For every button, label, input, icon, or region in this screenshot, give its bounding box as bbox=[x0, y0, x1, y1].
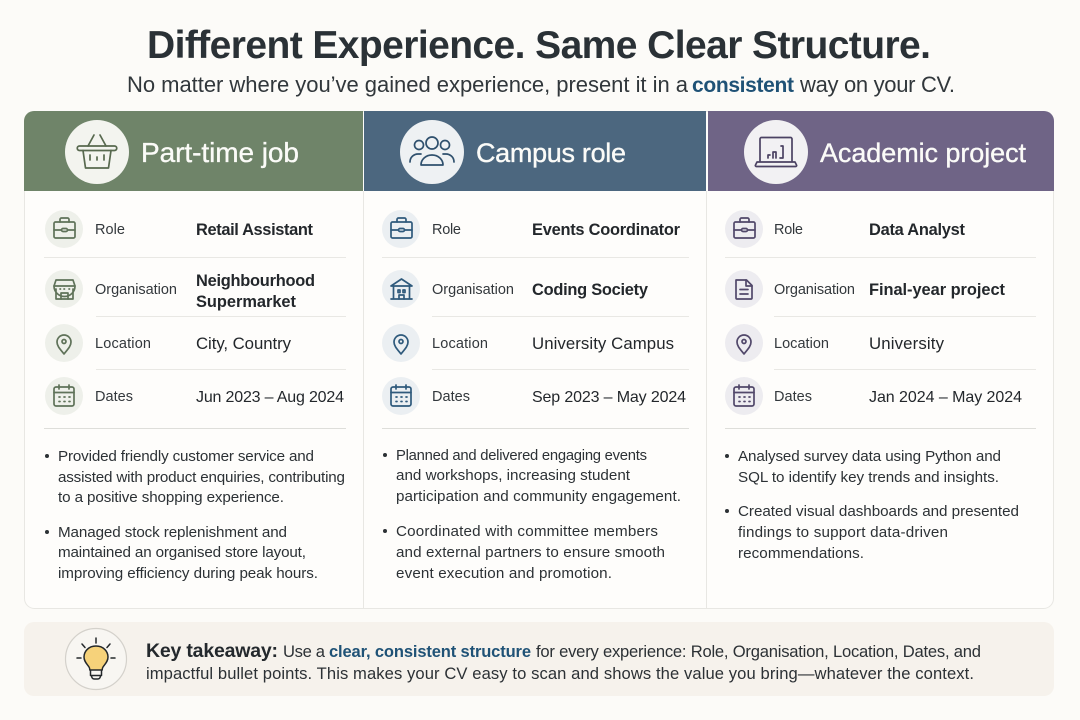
bullet list: part-time job bbox=[45, 448, 345, 582]
callout: key takeaway: impactful bullet points. This makes your CV easy to scan and shows the value you bring—whatever the context. bbox=[146, 664, 974, 683]
row: dates: Jan 2024 – May 2024 bbox=[869, 389, 1022, 406]
header: campus role bbox=[364, 111, 706, 191]
callout: key takeaway: Key takeaway: bbox=[146, 640, 278, 662]
bullet list: campus role: event execution and promotion. bbox=[396, 565, 612, 582]
header: campus role: Campus role bbox=[476, 138, 626, 168]
bullet list: academic project bbox=[725, 448, 1019, 562]
icon: map pin bbox=[394, 335, 408, 354]
row: dates: Sep 2023 – May 2024 bbox=[532, 389, 686, 406]
row: role bbox=[382, 210, 681, 248]
row: organisation: Final-year project bbox=[869, 281, 1006, 299]
bullet list: campus role bbox=[383, 448, 681, 582]
panel: part-time job bbox=[24, 111, 363, 582]
icon: briefcase bbox=[54, 218, 75, 238]
row: organisation bbox=[45, 270, 315, 311]
icon: storefront bbox=[54, 280, 75, 299]
bullet list: part-time job: to a positive shopping experience. bbox=[58, 489, 284, 506]
icon: light bulb bbox=[77, 638, 115, 679]
subtitle bbox=[127, 72, 955, 97]
row: dates bbox=[45, 377, 344, 415]
row: organisation bbox=[382, 270, 649, 308]
title: Different Experience. Same Clear Structure. bbox=[147, 24, 931, 67]
icon: people group bbox=[410, 137, 454, 165]
callout: key takeaway: for every experience: Role, Organisation, Location, Dates, and bbox=[536, 642, 981, 661]
bullet list: part-time job: maintained an organised store layout, bbox=[58, 544, 306, 561]
icon: calendar bbox=[391, 385, 411, 406]
bullet list: academic project: findings to support data-driven bbox=[738, 524, 948, 541]
bullet list: part-time job: Managed stock replenishment and bbox=[58, 524, 287, 541]
row: role: Retail Assistant bbox=[196, 221, 314, 239]
header: part-time job: Part-time job bbox=[141, 137, 299, 168]
subtitle: No matter where you’ve gained experience, present it in a bbox=[127, 72, 689, 97]
icon: laptop with chart bbox=[755, 138, 797, 167]
bullet list: academic project: SQL to identify key trends and insights. bbox=[738, 469, 999, 486]
row: location: Location bbox=[774, 336, 829, 352]
callout: key takeaway: Use a bbox=[283, 642, 326, 661]
bullet list: academic project: Created visual dashboards and presented bbox=[738, 503, 1019, 520]
icon: calendar bbox=[54, 385, 74, 406]
row: role bbox=[45, 210, 314, 248]
subtitle: way on your CV. bbox=[799, 72, 955, 97]
icon: document bbox=[736, 280, 752, 299]
bullet list: part-time job: Provided friendly customer service and bbox=[58, 448, 314, 465]
row: organisation: Organisation bbox=[95, 282, 177, 298]
header: part-time job bbox=[24, 111, 363, 191]
row: organisation: Coding Society bbox=[532, 281, 649, 299]
row: location: City, Country bbox=[196, 334, 292, 353]
row: location: University bbox=[869, 334, 945, 353]
row: location bbox=[725, 324, 945, 362]
panel: academic project bbox=[708, 111, 1054, 562]
row: dates bbox=[382, 377, 686, 415]
callout: key takeaway: clear, consistent structure bbox=[329, 643, 531, 661]
bullet list: part-time job: assisted with product enquiries, contributing bbox=[58, 469, 345, 486]
row: organisation bbox=[725, 270, 1006, 308]
bullet list: campus role: Planned and delivered engaging events bbox=[396, 448, 647, 464]
row: role: Role bbox=[774, 222, 803, 238]
row: dates bbox=[725, 377, 1022, 415]
row: role: Events Coordinator bbox=[532, 221, 681, 239]
row: dates: Dates bbox=[432, 389, 470, 405]
row: dates: Dates bbox=[774, 389, 812, 405]
row: location: Location bbox=[432, 336, 488, 352]
bullet list: campus role: and workshops, increasing student bbox=[396, 467, 631, 484]
icon: briefcase bbox=[391, 218, 412, 238]
callout: key takeaway bbox=[24, 622, 1054, 696]
bullet list: campus role: participation and community engagement. bbox=[396, 488, 681, 505]
row: dates: Jun 2023 – Aug 2024 bbox=[196, 389, 344, 406]
bullet list: campus role: Coordinated with committee members bbox=[396, 523, 658, 540]
bullet list: campus role: and external partners to ensure smooth bbox=[396, 544, 665, 561]
icon: map pin bbox=[57, 335, 71, 354]
icon: briefcase bbox=[734, 218, 755, 238]
panel: campus role bbox=[364, 111, 706, 582]
header: academic project: Academic project bbox=[820, 138, 1026, 168]
header: academic project bbox=[708, 111, 1054, 191]
row: organisation: Organisation bbox=[432, 282, 514, 298]
icon: calendar bbox=[734, 385, 754, 406]
row: location: Location bbox=[95, 336, 151, 352]
bullet list: part-time job: improving efficiency during peak hours. bbox=[58, 565, 318, 582]
card background bbox=[24, 112, 1054, 608]
row: role: Data Analyst bbox=[869, 221, 966, 239]
row: role: Role bbox=[95, 222, 125, 238]
row: role bbox=[725, 210, 966, 248]
icon: institution building bbox=[391, 279, 412, 299]
bullet list: academic project: Analysed survey data using Python and bbox=[738, 448, 1001, 465]
row: organisation: Supermarket bbox=[196, 293, 297, 311]
subtitle: consistent bbox=[692, 74, 794, 97]
row: location: University Campus bbox=[532, 334, 674, 353]
row: location bbox=[382, 324, 674, 362]
icon: map pin bbox=[737, 335, 751, 354]
row: dates: Dates bbox=[95, 389, 133, 405]
row: organisation: Neighbourhood bbox=[196, 272, 315, 290]
row: location bbox=[45, 324, 292, 362]
icon: shopping basket bbox=[77, 135, 117, 168]
row: role: Role bbox=[432, 222, 461, 238]
row: organisation: Organisation bbox=[774, 282, 855, 298]
bullet list: academic project: recommendations. bbox=[738, 545, 864, 562]
